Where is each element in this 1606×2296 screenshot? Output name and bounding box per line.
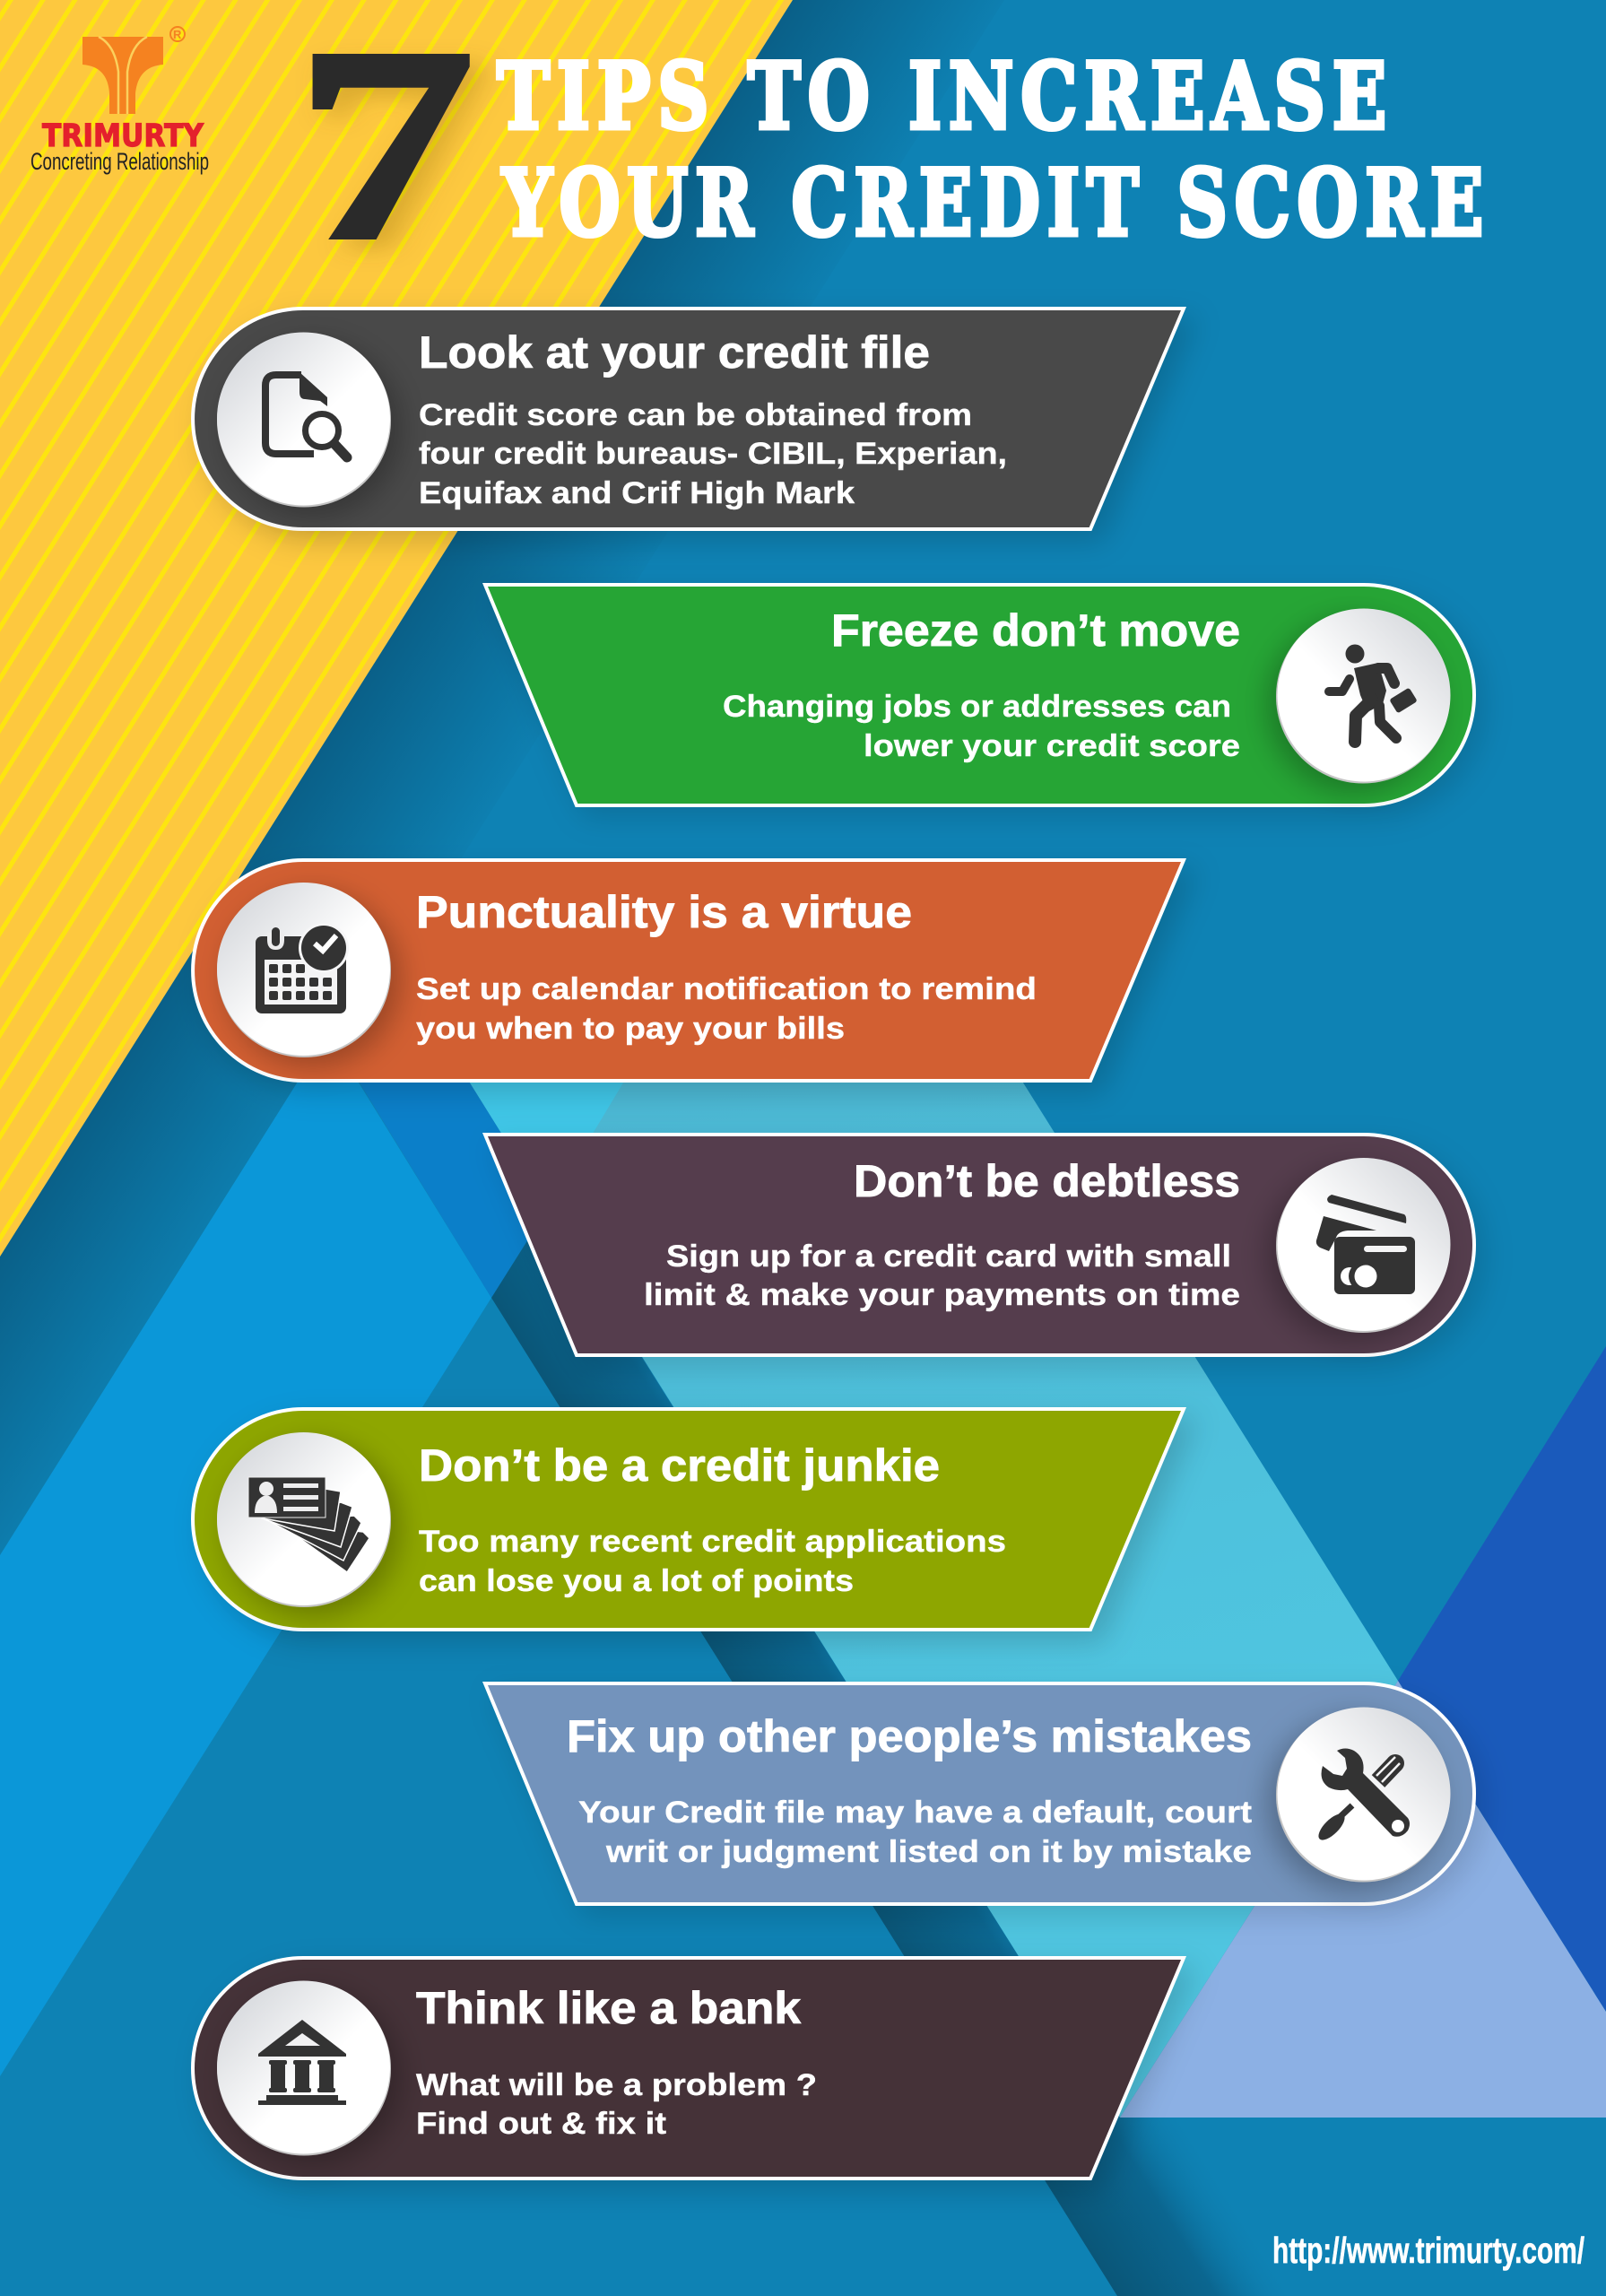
logo: Trimurty: R	[173, 28, 182, 41]
title	[497, 43, 1490, 257]
panel: look at your credit file: Look at your credit file	[419, 327, 930, 378]
panel: freeze don't move: Freeze don’t move	[831, 605, 1240, 656]
text block	[419, 1525, 1006, 1598]
panel: fix up other people's mistakes: Fix up other people’s mistakes	[567, 1711, 1252, 1761]
icon: credit cards	[1316, 1195, 1415, 1294]
panel: don't be debtless	[485, 1135, 1474, 1355]
panel: punctuality is a virtue	[193, 860, 1184, 1081]
icon: calendar with clock	[256, 923, 349, 1013]
panel: think like a bank: Think like a bank	[416, 1983, 801, 2033]
icon: wrench and screwdriver	[1315, 1749, 1410, 1844]
text block: Find out & fix it	[416, 2107, 666, 2141]
panel: don't be a credit junkie: Don’t be a credit junkie	[419, 1440, 940, 1491]
text block: Sign up for a credit card with small	[666, 1239, 1231, 1274]
icon: bank building	[258, 2020, 346, 2105]
panel: don't be a credit junkie	[193, 1409, 1184, 1630]
text block	[723, 690, 1240, 763]
text block: What will be a problem ?	[416, 2068, 817, 2102]
icon: fan of ID cards	[248, 1477, 369, 1572]
text block	[644, 1239, 1240, 1312]
panel: don't be debtless: Don’t be debtless	[854, 1156, 1240, 1206]
logo: Trimurty: Concreting Relationship	[30, 148, 209, 175]
text block	[578, 1796, 1252, 1869]
text block: lower your credit score	[864, 729, 1240, 763]
panel: look at your credit file	[193, 309, 1184, 529]
background: yellow striped corner	[0, 0, 793, 1257]
text block: Changing jobs or addresses can	[723, 690, 1231, 724]
text block: can lose you a lot of points	[419, 1564, 854, 1598]
panel: fix up other people's mistakes	[485, 1683, 1474, 1904]
text block: Set up calendar notification to remind	[416, 972, 1037, 1006]
panel: think like a bank	[193, 1958, 1184, 2179]
icon: running businessman	[1329, 644, 1418, 742]
text block: four credit bureaus- CIBIL, Experian,	[419, 437, 1007, 471]
panel: freeze don't move	[485, 585, 1474, 805]
text block: you when to pay your bills	[416, 1012, 845, 1046]
text block: Credit score can be obtained from	[419, 398, 972, 432]
text block: Your Credit file may have a default, court	[578, 1796, 1252, 1830]
icon: file with magnifier	[265, 372, 347, 457]
logo: Trimurty	[30, 27, 209, 175]
text block	[416, 972, 1037, 1046]
logo: Trimurty: TRIMURTY	[42, 118, 204, 154]
text block: Equifax and Crif High Mark	[419, 476, 855, 510]
text block	[419, 398, 1007, 510]
text block	[416, 2068, 817, 2141]
text block: Too many recent credit applications	[419, 1525, 1006, 1559]
text block: writ or judgment listed on it by mistake	[605, 1835, 1252, 1869]
panel: punctuality is a virtue: Punctuality is a virtue	[416, 887, 912, 937]
text block: limit & make your payments on time	[644, 1278, 1240, 1312]
